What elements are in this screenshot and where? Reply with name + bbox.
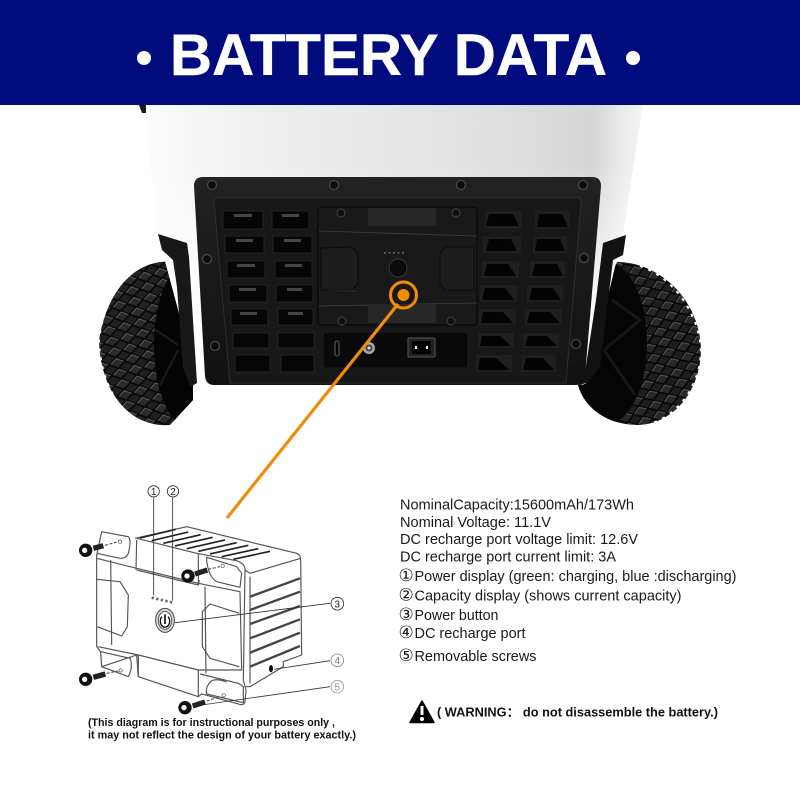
feature legend: ② [398,586,414,606]
title: BATTERY DATA [170,23,607,88]
diagram note [88,717,356,742]
feature legend: Capacity display (shows current capacity) [414,588,682,604]
number labels: 4 [335,656,341,667]
diagram note: (This diagram is for instructional purposes only , [88,717,335,729]
feature legend: ① [398,566,414,586]
status LED row [152,598,173,603]
left bracket [158,234,197,387]
AC socket [408,338,435,357]
product photo: power station rear [95,105,705,430]
power button [389,259,407,277]
icon: warning triangle [410,701,434,722]
feature legend: DC recharge port [414,626,526,642]
feature legend [398,566,736,666]
left wheel [99,262,193,426]
battery diagram [79,486,344,714]
battery top vents [140,529,270,559]
feature legend: ⑤ [398,646,414,666]
USB-C port [335,341,339,356]
power button icon [156,608,174,632]
number markers [148,486,344,693]
screws [79,540,225,714]
battery specifications [400,498,638,566]
number labels [151,487,341,693]
diagram note: it may not reflect the design of your battery exactly.) [88,730,356,742]
header banner [0,0,800,105]
warning [410,701,718,722]
warning text: ( WARNING： do not disassemble the battery.) [437,706,718,720]
feature legend: ③ [398,605,414,625]
right vent slots [476,211,570,372]
port bay [323,332,468,368]
right wheel [578,262,701,425]
DC port [363,342,375,354]
DC port on diagram [269,665,273,672]
battery specifications: NominalCapacity:15600mAh/173Wh [400,498,634,514]
number labels: 1 [151,487,157,498]
title bullet right [626,51,640,65]
callout line from battery to diagram [227,282,416,518]
panel screws [202,180,588,350]
right bracket [578,235,626,386]
callout dot [398,289,410,301]
feature legend: Power display (green: charging, blue :discharging) [414,569,736,585]
battery outline [97,527,302,705]
feature legend: ④ [398,623,414,643]
status LEDs [384,252,405,254]
battery specifications: Nominal Voltage: 11.1V [400,515,551,531]
battery specifications: DC recharge port current limit: 3A [400,550,616,566]
rear panel [194,177,601,385]
battery side vents [250,578,300,667]
title bullet left [137,51,151,65]
callout ring [390,282,416,308]
battery specifications: DC recharge port voltage limit: 12.6V [400,532,638,548]
left vent slots [223,211,314,372]
number labels: 3 [335,599,341,610]
number labels: 5 [335,682,341,693]
number labels: 2 [170,487,176,498]
leader lines [154,497,330,705]
battery plate [318,207,477,325]
white body [139,105,643,385]
feature legend: Power button [414,608,498,624]
feature legend: Removable screws [414,649,536,665]
